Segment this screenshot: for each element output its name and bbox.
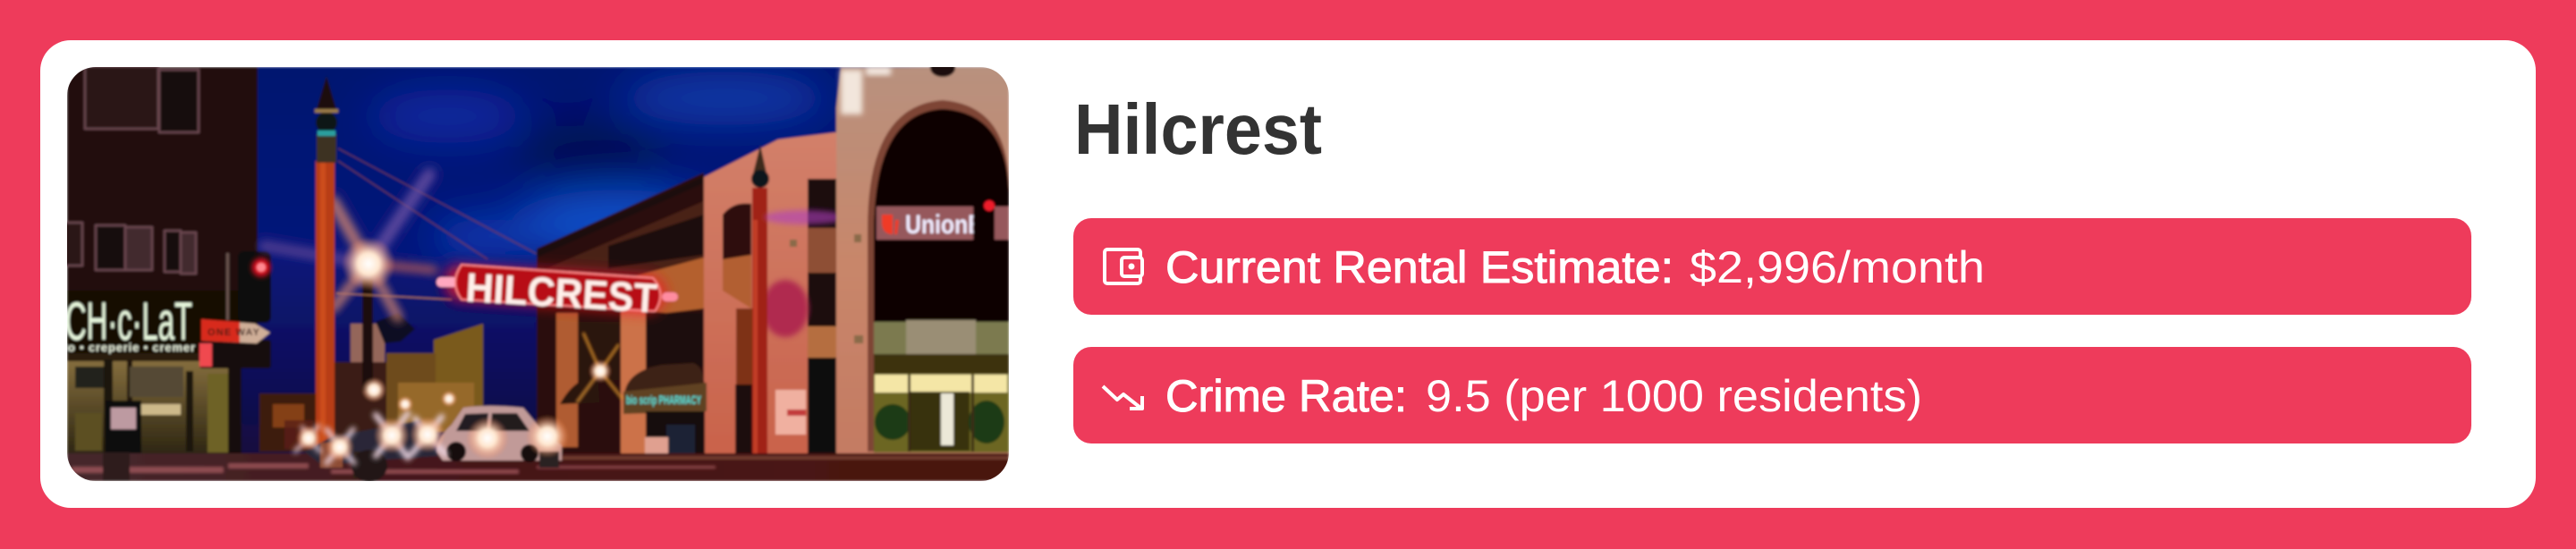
value: crime rate: 9.5 (per 1000 residents) <box>1426 371 1922 421</box>
poster <box>775 390 806 435</box>
street pole one <box>316 161 335 456</box>
icon: wallet <box>1105 249 1142 283</box>
panel: current rental estimate bar <box>1073 218 2471 315</box>
distant low buildings <box>259 393 322 452</box>
photo: Hillcrest sign at night: UnionB <box>905 210 984 240</box>
sky wires <box>336 148 537 300</box>
tower <box>836 67 1009 465</box>
star light rays <box>264 174 434 317</box>
value: rent: $2,996/month <box>1690 242 1985 292</box>
one way sign <box>201 319 270 343</box>
label: crime rate: Crime Rate: <box>1165 371 1407 421</box>
small star light <box>577 333 623 402</box>
street <box>67 453 1009 481</box>
purple stain <box>762 280 809 337</box>
neon sign: HILCREST <box>464 264 658 322</box>
headlight star flares <box>295 413 445 463</box>
photo: Hillcrest sign at night: ONE WAY <box>208 327 260 338</box>
pharmacy storefront <box>624 363 705 395</box>
traffic light <box>226 253 229 320</box>
photo: Hillcrest sign at night: ro • creperie • cremer <box>63 341 195 354</box>
right wing roof and underside <box>535 172 705 270</box>
title: Hilcrest <box>1074 89 1322 169</box>
bank sign <box>877 207 1009 240</box>
shop <box>67 291 246 358</box>
panel: crime rate bar <box>1073 347 2471 443</box>
mid building <box>704 132 836 460</box>
street pole two <box>752 145 767 177</box>
shop sign text: CH·c·LaT <box>65 291 192 351</box>
photo: Hillcrest sign at night: bio scrip PHARMACY <box>626 393 701 407</box>
photo: Hillcrest sign at night <box>63 59 1009 482</box>
left building <box>67 67 259 325</box>
label: current rental estimate: Current Rental Estimate: <box>1165 242 1674 292</box>
white car and traffic <box>284 406 562 482</box>
lobby <box>872 319 1009 356</box>
icon: trending down arrow <box>1103 386 1142 409</box>
